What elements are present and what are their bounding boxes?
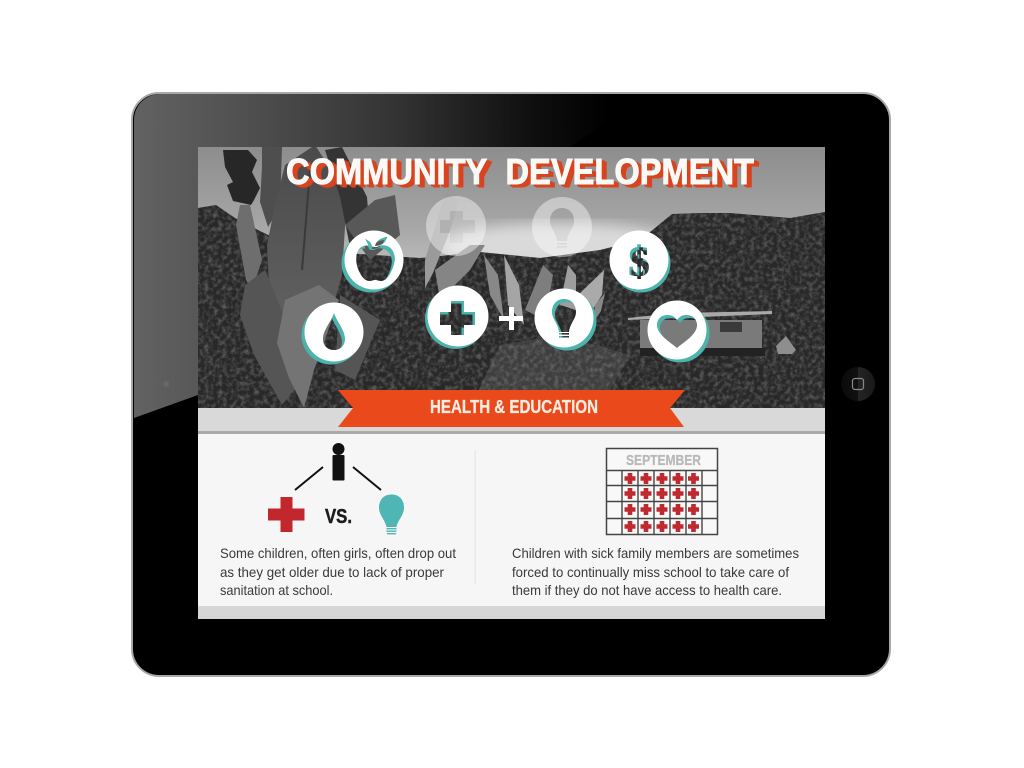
panel: lower white section [198, 434, 825, 607]
ribbon heading: HEALTH & EDUCATION [430, 396, 598, 417]
calendar: September [606, 448, 718, 535]
house [628, 311, 796, 356]
icon: dollar sign [610, 230, 670, 292]
connector lines [295, 467, 381, 490]
icon: plus sign [499, 307, 523, 330]
ribbon heading [338, 390, 685, 427]
tablet device [132, 93, 890, 676]
tablet bezel [132, 93, 890, 676]
icon: red cross [268, 497, 304, 532]
icon: cross [425, 286, 488, 349]
title: COMMUNITY DEVELOPMENT [291, 154, 759, 195]
icon: water drop [302, 302, 364, 364]
banana leaves left [223, 145, 400, 408]
icon: teal bulb [379, 494, 404, 534]
vs label: VS. [325, 506, 352, 528]
icon: faded cross [426, 196, 486, 256]
icon: heart [648, 300, 710, 362]
text block: left: Some children, often girls, often drop out [220, 545, 456, 561]
diagram: person choosing health or education [268, 443, 404, 534]
month label: SEPTEMBER [626, 452, 701, 469]
text block: right: Children with sick family members are sometimes [512, 545, 799, 561]
banana plants centre [425, 220, 605, 325]
panel: lower grey band [198, 408, 825, 433]
icon: apple [342, 230, 404, 292]
home button [841, 367, 875, 401]
text block: left: sanitation at school. [220, 582, 333, 598]
title: COMMUNITY DEVELOPMENT [289, 153, 757, 194]
icon: light bulb [534, 288, 596, 350]
text block: left: as they get older due to lack of proper [220, 564, 444, 580]
title: COMMUNITY DEVELOPMENT [286, 151, 754, 192]
icon: faded light bulb [532, 197, 592, 257]
screen glare [134, 94, 650, 418]
sick day crosses [624, 473, 699, 532]
text block: right: them if they do not have access to health care. [512, 582, 782, 598]
text block: right: forced to continually miss school to take care of [512, 564, 789, 580]
front camera [163, 381, 169, 387]
panel: photo background [198, 145, 825, 408]
icon: person [332, 443, 344, 480]
